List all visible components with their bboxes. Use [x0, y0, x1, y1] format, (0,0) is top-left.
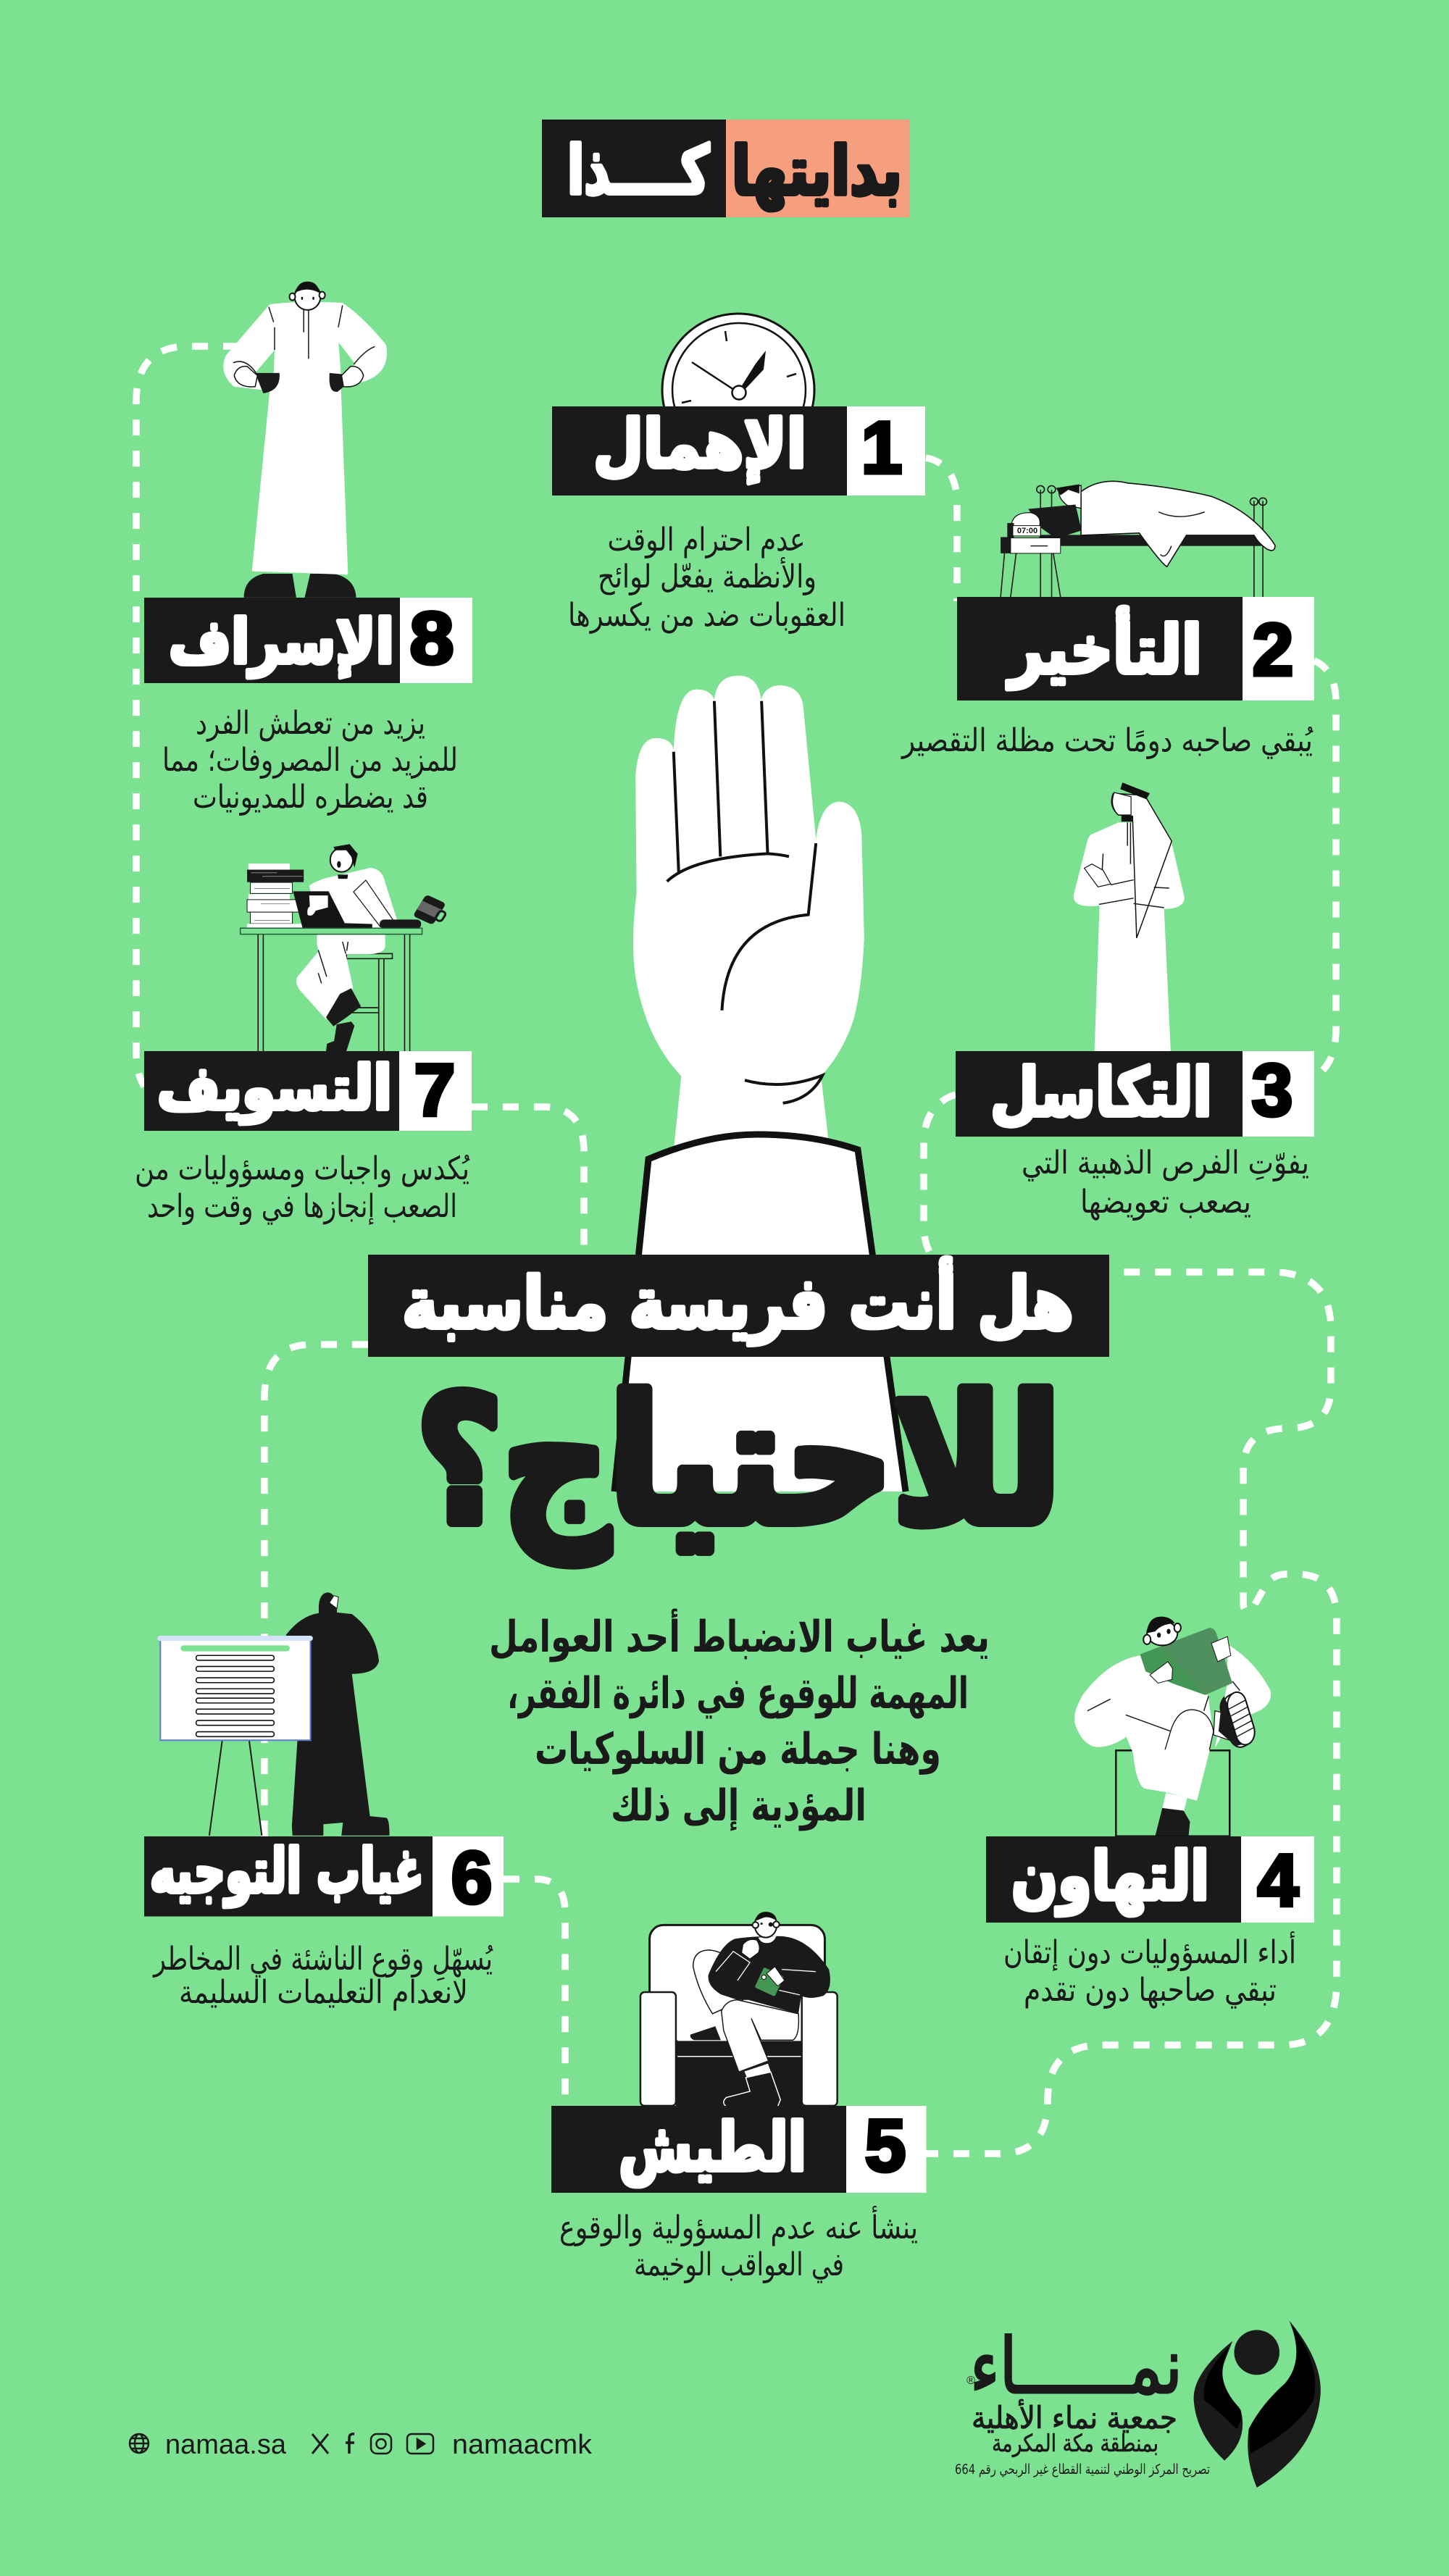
alarm clock time: 07:00: [1017, 527, 1037, 535]
logo: namaa association: [955, 2320, 1321, 2488]
description: قد يضطره للمديونيات: [193, 779, 428, 816]
panel: step 7 التسويف: [135, 844, 472, 1225]
label bar: [144, 597, 472, 683]
label bar: 5: [865, 2104, 906, 2187]
description: لانعدام التعليمات السليمة: [179, 1974, 468, 2011]
title: بدايتها كذا: بدايتها: [732, 133, 902, 211]
text block: central paragraph: يعد غياب الانضباط أحد العوامل: [489, 1608, 990, 1663]
connector: dashed path 1 to 2: [926, 458, 957, 601]
connector: dashed path 3 to 4: [924, 1095, 1337, 2154]
label bar: الطيش: [619, 2109, 806, 2186]
description: [152, 1941, 493, 2011]
description: يُكدس واجبات ومسؤوليات من: [135, 1150, 470, 1187]
panel: step 1 الإهمال: [552, 314, 925, 634]
text block: central paragraph: المؤدية إلى ذلك: [611, 1781, 867, 1831]
icon: wall clock: [662, 314, 814, 466]
text block: central paragraph: وهنا جملة من السلوكيات: [535, 1724, 941, 1775]
label bar: التهاون: [1011, 1838, 1209, 1916]
label bar: 6: [451, 1836, 492, 1919]
text block: central paragraph: [489, 1608, 990, 1831]
label bar: 1: [861, 406, 902, 489]
region line: بمنطقة مكة المكرمة: [992, 2429, 1158, 2457]
panel: step 2 التأخير: [901, 481, 1314, 759]
label bar: [957, 597, 1314, 701]
title: بدايتها كذا: [542, 120, 910, 217]
illustration: raised hand: [633, 676, 864, 1151]
label bar: [552, 406, 925, 495]
description: ينشأ عنه عدم المسؤولية والوقوع: [559, 2205, 918, 2246]
logo wordmark: نمــــــاء: [970, 2322, 1182, 2411]
association name: جمعية نماء الأهلية: [972, 2399, 1177, 2435]
icon: logo mark: [1194, 2320, 1321, 2488]
illustration: man in armchair holding a wallet: [640, 1912, 838, 2107]
description: [568, 522, 845, 634]
icon: youtube: [407, 2434, 433, 2454]
description: [162, 705, 458, 816]
label bar: 4: [1258, 1839, 1299, 1922]
description: عدم احترام الوقت: [607, 522, 806, 559]
connector: dashed path 7 to 8: [136, 346, 239, 1087]
label bar: 3: [1252, 1049, 1293, 1132]
headline: للاحتياج؟: للاحتياج؟: [416, 1360, 1061, 1564]
label bar: التسويف: [157, 1053, 392, 1124]
panel: step 8 الإسراف: [144, 282, 472, 816]
icon: X: [312, 2434, 328, 2454]
description: يُسهّلِ وقوع الناشئة في المخاطر: [152, 1941, 493, 1982]
registered mark: ®: [966, 2375, 975, 2387]
licence line: تصريح المركز الوطني لتنمية القطاع غير الربحي رقم 664: [955, 2462, 1210, 2477]
connector: dashed path banner to 7: [472, 1107, 584, 1255]
illustration: woman in abaya beside a presentation board: [157, 1592, 390, 1836]
illustration: man reading a green book on a stool: [1074, 1617, 1271, 1836]
icon: instagram: [371, 2434, 391, 2454]
description: تبقي صاحبها دون تقدم: [1024, 1972, 1277, 2009]
panel: step 6 غياب التوجيه: [144, 1592, 504, 2011]
description: [559, 2205, 918, 2283]
label bar: الإسراف: [169, 606, 394, 678]
icon: facebook: [346, 2434, 354, 2454]
label bar: غياب التوجيه: [150, 1836, 424, 1907]
description: في العواقب الوخيمة: [634, 2246, 844, 2283]
banner: هل أنت فريسة مناسبة: هل أنت فريسة مناسبة: [402, 1257, 1074, 1345]
panel: step 5 الطيش: [551, 1912, 926, 2283]
connector: dashed path 5 to 6: [504, 1879, 565, 2106]
description: للمزيد من المصروفات؛ مما: [162, 742, 458, 779]
illustration: tired student at a desk with books and laptop: [241, 844, 451, 1051]
website text: namaa.sa: [165, 2430, 287, 2460]
illustration: man in ghutra with folded arms: [1074, 782, 1185, 1051]
description: يزيد من تعطش الفرد: [196, 705, 425, 742]
description: [1003, 1931, 1296, 2009]
illustration: sleeping in bed: [1001, 481, 1275, 597]
label bar: 2: [1253, 609, 1293, 691]
icon: globe: [130, 2434, 149, 2453]
description: يُبقي صاحبه دومًا تحت مظلة التقصير: [901, 722, 1314, 759]
text block: central paragraph: المهمة للوقوع في دائرة الفقر،: [507, 1668, 969, 1719]
description: العقوبات ضد من يكسرها: [568, 597, 845, 634]
label bar: [956, 1049, 1314, 1137]
label bar: [551, 2104, 926, 2193]
connector: dashed path 2 to 3: [1314, 661, 1336, 1076]
connector: dashed path 6 to banner: [264, 1345, 368, 1836]
illustration: man in thobe with empty pockets: [223, 282, 387, 598]
title: بدايتها كذا: كــــذا: [567, 132, 709, 209]
label bar: 7: [414, 1049, 455, 1132]
description: [1022, 1145, 1309, 1221]
description: يصعب تعويضها: [1080, 1184, 1251, 1221]
label bar: التأخير: [1006, 606, 1202, 690]
description: يفوّتِ الفرص الذهبية التي: [1022, 1145, 1309, 1182]
description: أداء المسؤوليات دون إتقان: [1003, 1931, 1296, 1971]
label bar: [144, 1049, 472, 1132]
description: [135, 1150, 470, 1225]
description: الصعب إنجازها في وقت واحد: [147, 1188, 457, 1225]
label bar: الإهمال: [593, 406, 806, 484]
panel: step 3 التكاسل: [956, 782, 1314, 1221]
label bar: [986, 1836, 1314, 1923]
panel: step 4 التهاون: [986, 1617, 1314, 2009]
footer: website and social handles: [130, 2430, 593, 2460]
description: والأنظمة يفعّل لوائح: [598, 556, 817, 595]
label bar: 8: [410, 597, 454, 679]
label bar: التكاسل: [990, 1054, 1212, 1132]
handle text: namaacmk: [452, 2430, 593, 2460]
illustration: sleeve cuff: [614, 1134, 906, 1492]
